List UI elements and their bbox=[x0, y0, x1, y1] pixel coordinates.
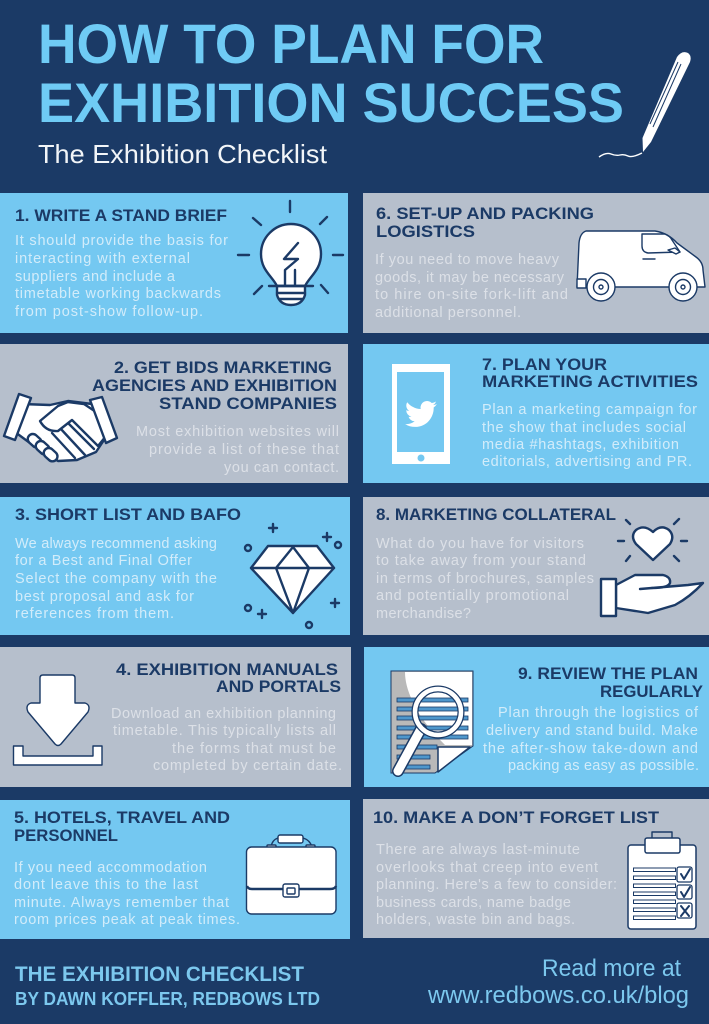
body 9 bbox=[483, 705, 699, 774]
body 5: dont leave this to the last bbox=[14, 877, 198, 893]
body 6 bbox=[375, 252, 568, 321]
body 10: There are always last-minute bbox=[376, 842, 580, 858]
heading 6: LOGISTICS bbox=[376, 222, 475, 241]
title: HOW TO PLAN FOR bbox=[38, 12, 544, 75]
body 4 bbox=[111, 706, 342, 774]
footer: read more link bbox=[427, 955, 689, 1009]
heading 5 bbox=[14, 808, 230, 845]
icon: light bulb bbox=[238, 201, 343, 305]
body 10 bbox=[376, 842, 617, 928]
heading 9: 9. REVIEW THE PLAN bbox=[518, 664, 698, 683]
heading 2: 2. GET BIDS MARKETING bbox=[114, 358, 332, 377]
body 7: media #hashtags, exhibition bbox=[482, 437, 679, 453]
body 5: minute. Always remember that bbox=[14, 895, 229, 911]
body 8: merchandise? bbox=[376, 606, 471, 622]
body 6: additional personnel. bbox=[375, 305, 521, 321]
heading 6 bbox=[376, 204, 594, 241]
body 5 bbox=[14, 860, 240, 928]
body 1: timetable working backwards bbox=[15, 286, 221, 302]
body 6: If you need to move heavy bbox=[375, 252, 560, 268]
body 4: completed by certain date. bbox=[153, 758, 342, 774]
heading 7 bbox=[482, 355, 698, 391]
panel: 6 set-up and packing bbox=[363, 193, 709, 333]
heading 4: 4. EXHIBITION MANUALS bbox=[116, 660, 338, 679]
panel: 2 get bids bbox=[0, 344, 348, 483]
body 1: interacting with external bbox=[15, 251, 190, 267]
body 4: Download an exhibition planning bbox=[111, 706, 336, 722]
heading 2: STAND COMPANIES bbox=[159, 394, 337, 413]
body 8: in terms of brochures, samples bbox=[376, 571, 594, 587]
body 3: references from them. bbox=[15, 606, 174, 622]
body 7: the show that includes social bbox=[482, 420, 686, 436]
icon: handshake bbox=[4, 394, 117, 463]
heading 4 bbox=[116, 660, 341, 696]
body 2: Most exhibition websites will bbox=[136, 424, 339, 440]
body 10: holders, waste bin and bags. bbox=[376, 912, 575, 928]
body 3: for a Best and Final Offer bbox=[15, 553, 192, 569]
heading 9: REGULARLY bbox=[600, 682, 704, 701]
panel: 7 plan your marketing bbox=[363, 344, 709, 483]
body 7: editorials, advertising and PR. bbox=[482, 454, 692, 470]
body 10: planning. Here's a few to consider: bbox=[376, 877, 617, 893]
body 4: the forms that must be bbox=[172, 741, 336, 757]
title: EXHIBITION SUCCESS bbox=[38, 71, 624, 134]
body 9: the after-show take-down and bbox=[483, 741, 698, 757]
heading 3: 3. SHORT LIST AND BAFO bbox=[15, 505, 241, 524]
body 5: room prices peak at peak times. bbox=[14, 912, 240, 928]
body 2 bbox=[136, 424, 339, 476]
body 3: Select the company with the bbox=[15, 571, 217, 587]
body 9: delivery and stand build. Make bbox=[486, 723, 698, 739]
body 10: business cards, name badge bbox=[376, 895, 571, 911]
panel: 8 marketing collateral bbox=[363, 497, 709, 635]
body 8: What do you have for visitors bbox=[376, 536, 584, 552]
body 2: you can contact. bbox=[224, 460, 339, 476]
panel: 1 write a stand brief bbox=[0, 193, 348, 333]
body 3: best proposal and ask for bbox=[15, 589, 194, 605]
heading 1: 1. WRITE A STAND BRIEF bbox=[15, 206, 227, 225]
icon: van bbox=[577, 231, 705, 301]
footer: checklist credit: THE EXHIBITION CHECKLIST bbox=[15, 963, 304, 986]
body 5: If you need accommodation bbox=[14, 860, 207, 876]
body 2: provide a list of these that bbox=[149, 442, 339, 458]
icon: briefcase bbox=[246, 835, 336, 914]
heading 2 bbox=[92, 358, 337, 413]
icon: hand holding heart bbox=[601, 519, 703, 616]
heading 7: MARKETING ACTIVITIES bbox=[482, 372, 698, 391]
body 1 bbox=[15, 233, 228, 320]
footer: checklist credit bbox=[15, 963, 320, 1009]
body 1: from post-show follow-up. bbox=[15, 304, 203, 320]
body 6: to hire on-site fork-lift and bbox=[375, 287, 568, 303]
heading 10: 10. MAKE A DON’T FORGET LIST bbox=[373, 808, 660, 827]
icon: phone with twitter bird bbox=[392, 364, 450, 464]
heading 8: 8. MARKETING COLLATERAL bbox=[376, 505, 616, 524]
panel: 5 hotels travel personnel bbox=[0, 800, 350, 939]
footer: read more link: www.redbows.co.uk/blog bbox=[427, 982, 689, 1009]
body 8: and potentially promotional bbox=[376, 588, 569, 604]
body 10: overlooks that creep into event bbox=[376, 860, 598, 876]
icon: diamond bbox=[245, 524, 341, 628]
body 3: We always recommend asking bbox=[15, 536, 217, 552]
heading 9 bbox=[518, 664, 704, 701]
panel: 10 don't forget list bbox=[363, 799, 709, 938]
body 1: suppliers and include a bbox=[15, 269, 176, 285]
subtitle: The Exhibition Checklist bbox=[38, 139, 328, 169]
body 7: Plan a marketing campaign for bbox=[482, 402, 697, 418]
heading 2: AGENCIES AND EXHIBITION bbox=[92, 376, 337, 395]
body 4: timetable. This typically lists all bbox=[113, 723, 336, 739]
heading 5: PERSONNEL bbox=[14, 826, 118, 845]
footer: checklist credit: BY DAWN KOFFLER, REDBOWS LTD bbox=[15, 989, 320, 1009]
body 8: to take away from your stand bbox=[376, 553, 586, 569]
body 6: goods, it may be necessary bbox=[375, 270, 565, 286]
body 7 bbox=[482, 402, 697, 470]
icon: document with magnifier bbox=[391, 671, 473, 773]
icon: download arrow bbox=[14, 675, 102, 765]
icon: clipboard checklist bbox=[628, 832, 696, 929]
heading 5: 5. HOTELS, TRAVEL AND bbox=[14, 808, 230, 827]
heading 7: 7. PLAN YOUR bbox=[482, 355, 607, 374]
body 3 bbox=[15, 536, 217, 622]
panel: 4 exhibition manuals bbox=[0, 647, 351, 787]
panel: 3 short list and BAFO bbox=[0, 497, 350, 635]
footer: read more link: Read more at bbox=[542, 955, 681, 982]
panel: 9 review the plan bbox=[364, 647, 709, 787]
body 8 bbox=[376, 536, 594, 622]
body 9: packing as easy as possible. bbox=[508, 758, 699, 774]
body 9: Plan through the logistics of bbox=[498, 705, 699, 721]
body 1: It should provide the basis for bbox=[15, 233, 228, 249]
heading 6: 6. SET-UP AND PACKING bbox=[376, 204, 594, 223]
icon: pen bbox=[599, 52, 691, 157]
heading 4: AND PORTALS bbox=[216, 677, 341, 696]
title bbox=[38, 12, 624, 134]
